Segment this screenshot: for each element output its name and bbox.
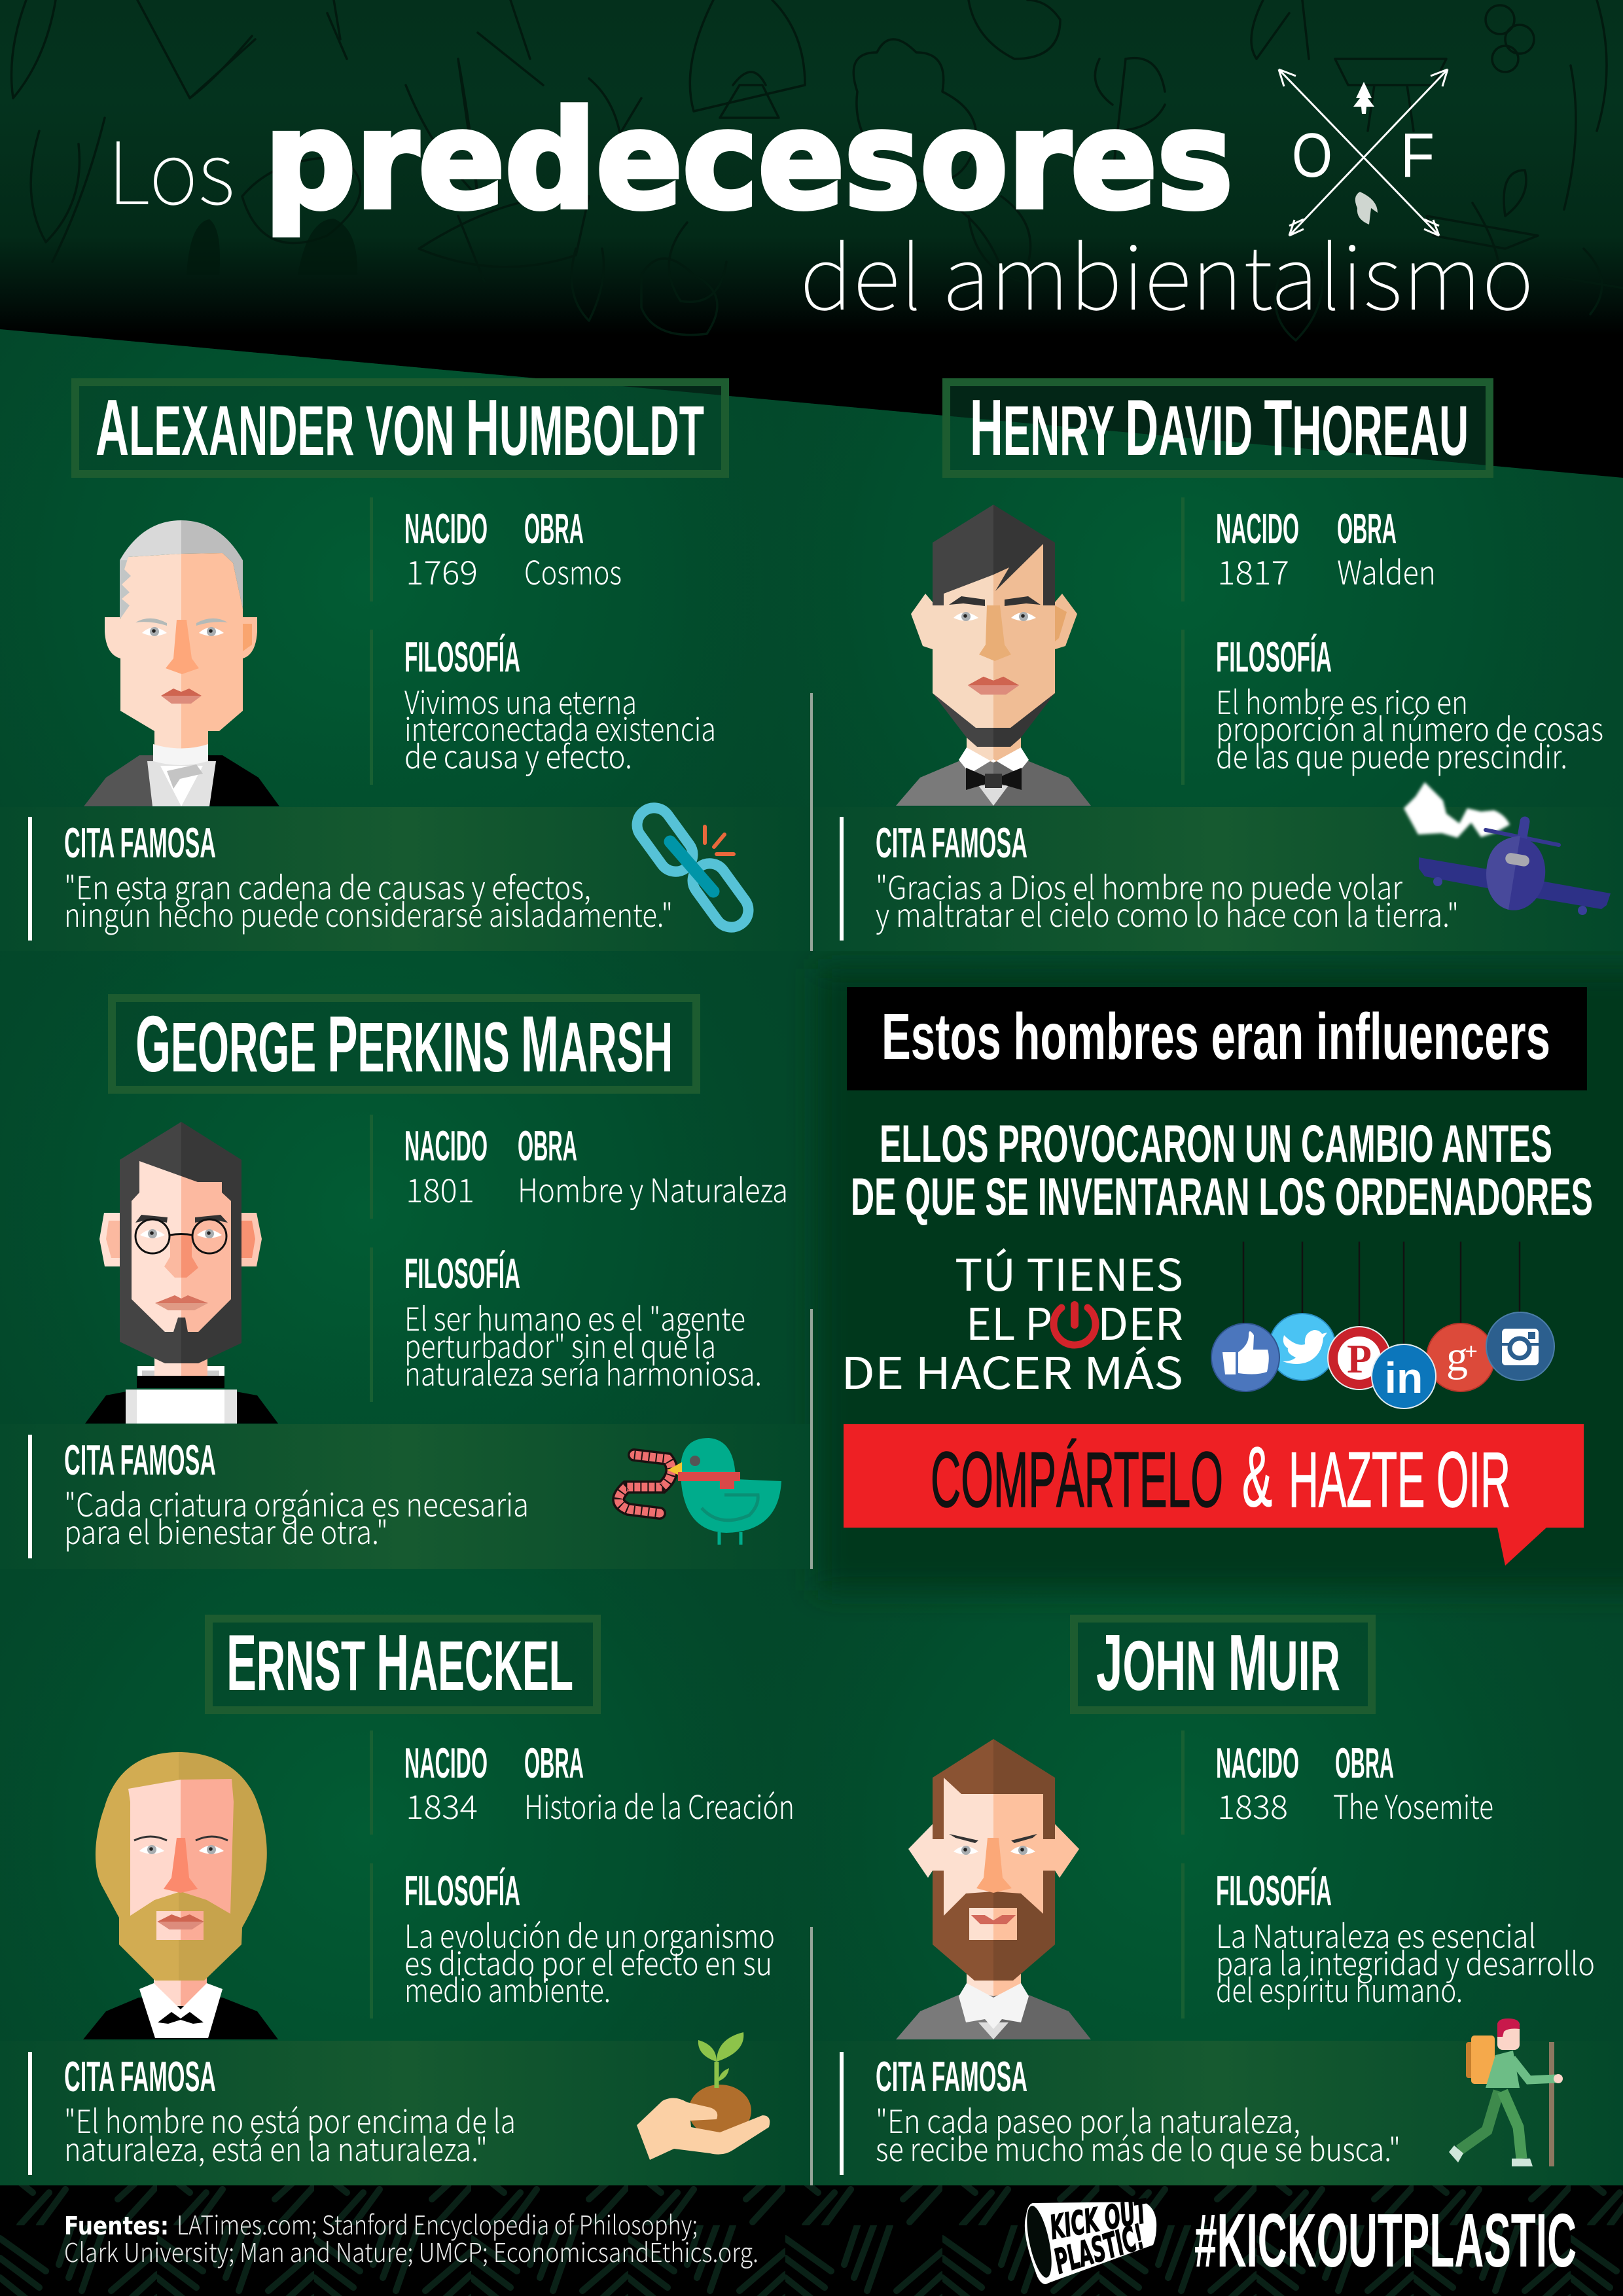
philosophy: FILOSOFÍA [1216, 1867, 1332, 1914]
icon: google plus: g [1446, 1333, 1468, 1380]
icon: plane with smoke [1404, 782, 1611, 915]
name heading: GEORGE PERKINS MARSH [135, 999, 673, 1088]
portrait [84, 520, 279, 806]
quote [28, 2052, 516, 2175]
speech banner: COMPÁRTELO [931, 1436, 1223, 1524]
icon: pinterest: P [1347, 1337, 1372, 1382]
icon: pinterest [1328, 1327, 1391, 1390]
title: del ambientalismo: del ambientalismo [800, 208, 1534, 335]
icon: bird and worm [618, 1438, 781, 1545]
quote [840, 817, 1459, 941]
philosophy [404, 1249, 762, 1395]
philosophy [1216, 1867, 1595, 2012]
quote: "Gracias a Dios el hombre no puede volar [876, 863, 1402, 909]
sources [64, 2204, 758, 2270]
quote: para el bienestar de otra." [64, 1507, 388, 1554]
quote: "El hombre no está por encima de la [64, 2096, 516, 2143]
logo: crossed arrows O F [1279, 69, 1448, 236]
panel: influencers call to action [841, 987, 1593, 1566]
quote: CITA FAMOSA [64, 1436, 216, 1484]
facts: NACIDO [1216, 1739, 1299, 1787]
icon: linkedin: in [1385, 1354, 1423, 1402]
icon: power button [1054, 1305, 1096, 1345]
quote: CITA FAMOSA [876, 2053, 1027, 2100]
quote: y maltratar el cielo como lo hace con la tierra." [876, 890, 1459, 937]
icon: google plus: + [1465, 1339, 1478, 1364]
philosophy: La Naturaleza es esencial [1216, 1911, 1536, 1958]
facts: OBRA [1335, 1739, 1394, 1787]
philosophy [404, 1867, 775, 2012]
facts [1216, 505, 1436, 594]
portrait [896, 505, 1091, 806]
facts: 1834 [406, 1782, 478, 1829]
sources: Fuentes: [64, 2212, 169, 2240]
philosophy: de causa y efecto. [404, 732, 632, 778]
facts: Cosmos [524, 547, 622, 594]
speech banner: & [1242, 1429, 1272, 1524]
facts: OBRA [524, 505, 584, 552]
quote: CITA FAMOSA [64, 2053, 216, 2100]
facts: OBRA [518, 1122, 577, 1170]
philosophy: FILOSOFÍA [404, 1867, 520, 1914]
quote: ningún hecho puede considerarse aisladamente." [64, 890, 673, 937]
icon: instagram [1486, 1312, 1554, 1380]
power message: EL P [966, 1289, 1052, 1353]
philosophy: interconectada existencia [404, 704, 716, 751]
facts: Hombre y Naturaleza [518, 1165, 788, 1212]
logo: Kick Out Plastic megaphone: PLASTIC! [1050, 2217, 1149, 2282]
footer [0, 2185, 1623, 2296]
quote: CITA FAMOSA [64, 819, 216, 867]
philosophy: del espíritu humano. [1216, 1965, 1463, 2012]
icon: linkedin [1372, 1344, 1436, 1408]
facts: OBRA [524, 1739, 584, 1787]
icon: hand with sprout [637, 2032, 770, 2160]
power message: DE HACER MÁS [841, 1338, 1183, 1402]
panel: George Perkins Marsh [28, 998, 788, 1558]
philosophy [1216, 633, 1603, 778]
panel: Henry David Thoreau [840, 382, 1611, 941]
panel: John Muir [840, 1618, 1595, 2175]
facts: Historia de la Creación [524, 1782, 794, 1829]
portrait [896, 1739, 1091, 2039]
power message: DER [1097, 1289, 1183, 1353]
headline box [847, 987, 1587, 1090]
facts: NACIDO [404, 505, 488, 552]
icon: google plus [1427, 1323, 1495, 1391]
logo: Kick Out Plastic megaphone: KICK OUT [1047, 2192, 1152, 2247]
name heading: HENRY DAVID THOREAU [970, 383, 1469, 472]
quote: "En cada paseo por la naturaleza, [876, 2096, 1300, 2143]
portrait [83, 1752, 278, 2039]
icon: twitter [1269, 1314, 1336, 1380]
facts [1216, 1739, 1493, 1829]
philosophy: es dictado por el efecto en su [404, 1939, 772, 1985]
philosophy: naturaleza sería harmoniosa. [404, 1349, 762, 1395]
facts: 1838 [1217, 1782, 1288, 1829]
philosophy: FILOSOFÍA [404, 1249, 520, 1297]
philosophy: La evolución de un organismo [404, 1911, 775, 1958]
name heading: JOHN MUIR [1096, 1618, 1340, 1707]
quote: naturaleza, está en la naturaleza." [64, 2125, 488, 2171]
facts: NACIDO [1216, 505, 1299, 552]
name heading: ERNST HAECKEL [226, 1618, 573, 1707]
quote [28, 1435, 529, 1558]
header background [0, 0, 1623, 524]
dark mushroom silhouettes [187, 219, 357, 275]
icon: broken chain [630, 801, 755, 934]
facts: NACIDO [404, 1122, 488, 1170]
dividers [370, 497, 373, 785]
quote: CITA FAMOSA [876, 819, 1027, 867]
statement [851, 1115, 1593, 1227]
icon: facebook like [1211, 1323, 1279, 1391]
title: Los: Los [107, 105, 235, 230]
quote: se recibe mucho más de lo que se busca." [876, 2125, 1400, 2171]
sources: Clark University; Man and Nature; UMCP; EconomicsandEthics.org. [64, 2232, 758, 2270]
philosophy [404, 633, 716, 778]
philosophy: El hombre es rico en [1216, 677, 1468, 724]
speech banner [844, 1424, 1584, 1566]
power message: TÚ TIENES [955, 1240, 1183, 1304]
quote bands [0, 807, 1623, 2185]
philosophy: FILOSOFÍA [404, 633, 520, 681]
philosophy: FILOSOFÍA [1216, 633, 1332, 681]
quote: "Cada criatura orgánica es necesaria [64, 1480, 529, 1526]
portrait [85, 1122, 278, 1424]
facts: OBRA [1337, 505, 1397, 552]
facts: The Yosemite [1333, 1782, 1493, 1829]
facts [404, 1739, 794, 1829]
dividers [1181, 497, 1185, 785]
quote [840, 2052, 1400, 2175]
quote: "En esta gran cadena de causas y efectos, [64, 863, 591, 909]
philosophy: El ser humano es el "agente [404, 1294, 745, 1340]
philosophy: medio ambiente. [404, 1965, 611, 2012]
dividers [1181, 1731, 1185, 2018]
philosophy: Vivimos una eterna [404, 677, 637, 724]
logo: crossed arrows O F: O [1292, 120, 1332, 190]
logo: crossed arrows O F: F [1400, 120, 1435, 190]
column dividers [810, 693, 813, 2185]
icon: hiker [1449, 2018, 1563, 2166]
doodle pattern [12, 0, 1623, 340]
philosophy: de las que puede prescindir. [1216, 732, 1567, 778]
panel: Alexander von Humboldt [28, 382, 755, 941]
facts [404, 1122, 788, 1212]
title: predecesores: predecesores [264, 83, 1233, 239]
name heading: ALEXANDER VON HUMBOLDT [96, 383, 704, 472]
facts: 1769 [406, 547, 478, 594]
sources: LATimes.com; Stanford Encyclopedia of Philosophy; [177, 2204, 698, 2242]
facts: 1817 [1217, 547, 1289, 594]
title [107, 83, 1534, 335]
logo: Kick Out Plastic megaphone [1022, 2192, 1156, 2284]
dividers [370, 1115, 373, 1402]
facts: NACIDO [404, 1739, 488, 1787]
power message [841, 1240, 1183, 1402]
philosophy: perturbador" sin el que la [404, 1321, 716, 1368]
hanging social icons [1211, 1242, 1554, 1408]
facts: Walden [1337, 547, 1436, 594]
green panel background [0, 329, 1623, 2041]
dividers [370, 1731, 373, 2018]
facts: 1801 [406, 1165, 474, 1212]
facts [404, 505, 622, 594]
quote [28, 817, 673, 941]
panel: Ernst Haeckel [28, 1618, 794, 2175]
